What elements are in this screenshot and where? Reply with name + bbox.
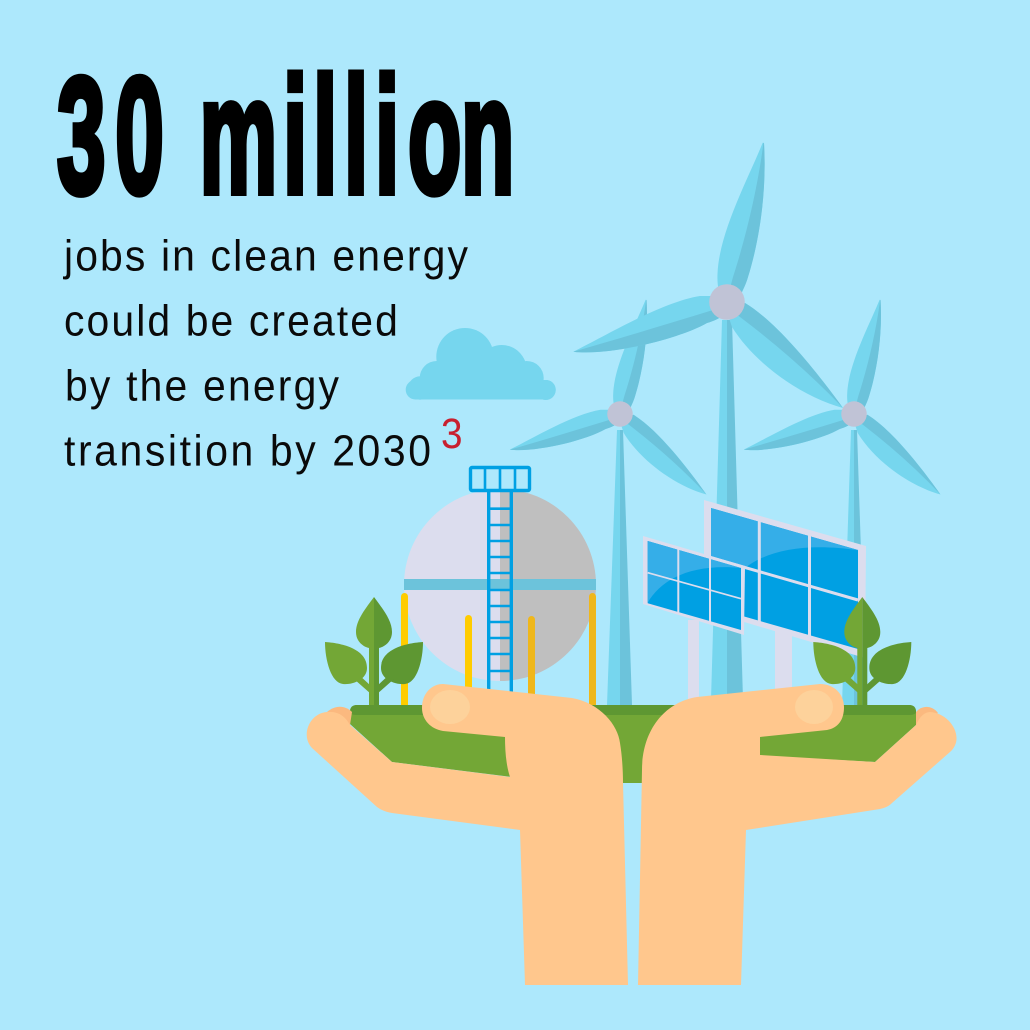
text block: jobs description: by the energy [65,362,340,411]
text block: jobs description: jobs in clean energy [62,232,469,281]
right hand holding the ground [638,684,957,985]
wind turbine: centre [573,143,843,700]
plant: right [813,597,911,706]
left hand holding the ground [307,684,628,985]
infographic canvas [56,70,956,985]
text block: jobs description [62,232,469,476]
solar panel: large [704,500,866,689]
icon: cloud [406,328,556,400]
wind turbine: right [744,300,940,705]
footnote reference number: 3 [441,409,463,457]
plant: left [325,597,423,706]
gas storage tank with ladder [401,467,596,708]
green ground patch [350,705,916,783]
title: 30 million: 30 million [57,43,514,227]
wind turbine: left [510,300,706,705]
solar panel: small [643,530,745,705]
text block: jobs description: could be created [64,297,398,346]
text block: jobs description: transition by 2030 [64,427,431,476]
